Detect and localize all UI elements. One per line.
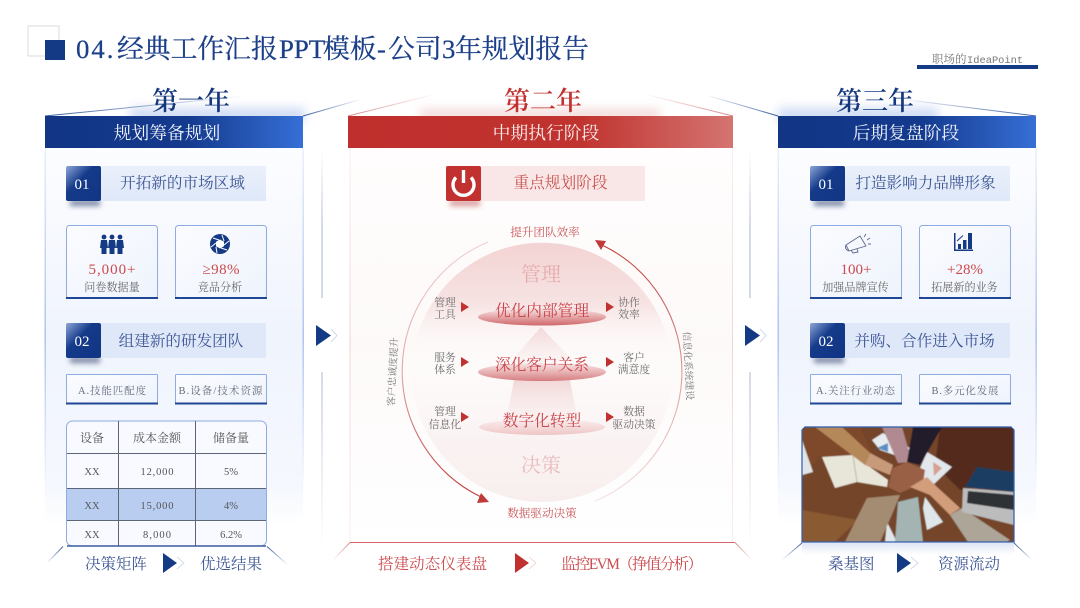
brand mark: 职场的: [932, 52, 966, 66]
circular diagram: [384, 240, 697, 503]
panel: year two: [333, 87, 752, 573]
year heading: 第二年: [504, 87, 582, 116]
option box B: B.设备/技术资源: [178, 384, 263, 397]
data table: XX: [84, 467, 100, 478]
stage banner: [348, 116, 733, 148]
bottom flow: decision matrix to result: 决策矩阵: [85, 555, 147, 573]
data table: 储备量: [213, 430, 249, 445]
right labels: 数据: [623, 404, 645, 418]
data table: 成本金额: [133, 430, 182, 445]
stat card: competitor analysis: ≥98%: [202, 262, 240, 278]
header decoration: title squares: [28, 26, 65, 60]
focus tag with power icon: 重点规划阶段: [513, 174, 608, 192]
data table: 4%: [224, 501, 238, 512]
ellipse tiers: [478, 308, 606, 435]
rotated label left: 客户忠诚度提升: [384, 337, 401, 406]
option box B: B.多元化发展: [932, 384, 999, 397]
stat card: competitor analysis: [175, 226, 267, 299]
focus tag with power icon: [446, 166, 645, 206]
data table: 5%: [224, 467, 238, 478]
data table: 设备: [80, 431, 104, 445]
right labels: 协作: [618, 295, 640, 309]
left labels: 服务: [434, 350, 456, 364]
bottom flow: decision matrix to result: 优选结果: [200, 555, 262, 573]
panel body: year one: [44, 148, 304, 525]
item 02 tag: [810, 323, 1010, 363]
bottom flow: sankey to resource flow: 桑基图: [828, 555, 875, 573]
bottom flow: dashboard to EVM: 搭建动态仪表盘: [378, 554, 487, 573]
right labels: 效率: [618, 307, 640, 321]
option box A: [66, 374, 158, 404]
title: 3: [442, 34, 455, 64]
tier titles: [495, 302, 589, 430]
icon: people: [100, 235, 124, 254]
data table: 15,000: [140, 501, 174, 512]
stage banner: [45, 116, 303, 148]
decision label: 决策: [521, 454, 561, 477]
panel: year three: [706, 87, 1037, 573]
title: 04.: [76, 34, 116, 64]
title: 年规划报告: [455, 34, 589, 64]
tier titles: 数字化转型: [503, 412, 581, 430]
arrow: year one to year two: [316, 325, 337, 346]
stat card: business: 拓展新的业务: [931, 280, 998, 294]
arrow: year two to year three: [745, 325, 766, 346]
stat card: questionnaire: 问卷数据量: [84, 280, 140, 294]
left labels: [429, 295, 461, 431]
data table: 6.2%: [220, 530, 242, 541]
stat card: questionnaire: 5,000+: [88, 262, 136, 278]
manage label: 管理: [521, 263, 561, 286]
tier titles: 优化内部管理: [495, 302, 589, 320]
data table: XX: [84, 501, 100, 512]
title: -: [377, 34, 386, 64]
cycle arc left: [402, 242, 489, 503]
option box A: A.技能匹配度: [78, 384, 146, 397]
stat card: business: +28%: [947, 262, 983, 278]
item 01 tag: [66, 166, 266, 206]
option box B: [919, 374, 1011, 404]
icon: megaphone: [845, 234, 871, 253]
stage banner: 中期执行阶段: [493, 123, 600, 143]
item 01 tag: 01: [74, 177, 90, 193]
rotated label right: 信息化系统建设: [680, 331, 697, 401]
left labels: 管理: [434, 404, 456, 418]
bottom flow: dashboard to EVM: [333, 542, 752, 573]
data table: 12,000: [140, 467, 174, 478]
stat card: business: [919, 226, 1011, 299]
left labels: 管理: [434, 295, 456, 309]
stage banner: 规划筹备规划: [114, 123, 220, 143]
title: 经典工作汇报: [117, 34, 278, 64]
bottom flow: sankey to resource flow: [782, 543, 1032, 573]
stat card: brand: 100+: [841, 262, 871, 278]
title: PPT: [279, 34, 325, 64]
lower dome: [412, 372, 672, 502]
panel: year one: [44, 87, 362, 573]
bottom flow: dashboard to EVM: 监控EVM（挣值分析）: [561, 555, 703, 573]
stage banner: [778, 116, 1036, 148]
separator lines between panels: [322, 150, 750, 547]
right labels: [612, 295, 656, 431]
data table: XX: [84, 530, 100, 541]
item 01 tag: 01: [818, 177, 834, 193]
photo: team hands: [802, 427, 1014, 542]
option box A: A.关注行业动态: [816, 384, 896, 397]
upper dome: [415, 243, 669, 345]
option box B: [175, 374, 267, 404]
data table: 8,000: [143, 530, 171, 541]
title: 模板: [323, 34, 377, 64]
roof lines: [348, 94, 733, 121]
item 02 tag: 组建新的研发团队: [119, 332, 244, 350]
title: 公司: [388, 34, 442, 64]
brand mark: IdeaPoint: [967, 55, 1023, 67]
item 01 tag: [810, 166, 1010, 206]
item 02 tag: 02: [818, 334, 834, 350]
left labels: 工具: [434, 308, 457, 321]
bottom cycle label: 数据驱动决策: [507, 506, 577, 520]
option box A: [810, 374, 902, 404]
year heading: 第一年: [152, 87, 230, 116]
stage banner: 后期复盘阶段: [853, 123, 960, 143]
bottom flow: decision matrix to result: [47, 546, 288, 573]
right labels: 客户: [623, 350, 645, 364]
data table: [66, 421, 266, 546]
panel body: year three: [778, 148, 1037, 525]
right labels: 满意度: [618, 362, 650, 376]
stat card: questionnaire: [66, 226, 158, 299]
roof lines: [45, 96, 362, 122]
tier titles: 深化客户关系: [495, 356, 589, 374]
top cycle label: 提升团队效率: [510, 225, 580, 239]
cones: [506, 327, 578, 422]
year heading: 第三年: [836, 87, 914, 116]
stat card: brand: [810, 226, 902, 299]
item 01 tag: 开拓新的市场区域: [120, 174, 245, 192]
left labels: 信息化: [429, 417, 461, 431]
item 02 tag: 并购、合作进入市场: [854, 332, 995, 350]
bottom flow: sankey to resource flow: 资源流动: [938, 555, 1000, 573]
roof lines: [706, 95, 1036, 122]
stat card: brand: 加强品牌宣传: [822, 280, 889, 294]
icon: bar chart: [954, 233, 973, 251]
icon: aperture: [210, 234, 230, 254]
small arrows: [461, 302, 614, 422]
item 02 tag: [66, 323, 266, 363]
cycle arc right: [595, 240, 682, 501]
right labels: 驱动决策: [612, 417, 656, 431]
brand mark: [917, 52, 1038, 69]
item 02 tag: 02: [74, 334, 90, 350]
left labels: 体系: [434, 362, 456, 376]
stat card: competitor analysis: 竞品分析: [198, 280, 242, 294]
item 01 tag: 打造影响力品牌形象: [855, 174, 996, 192]
panel body: year two: [350, 148, 733, 542]
